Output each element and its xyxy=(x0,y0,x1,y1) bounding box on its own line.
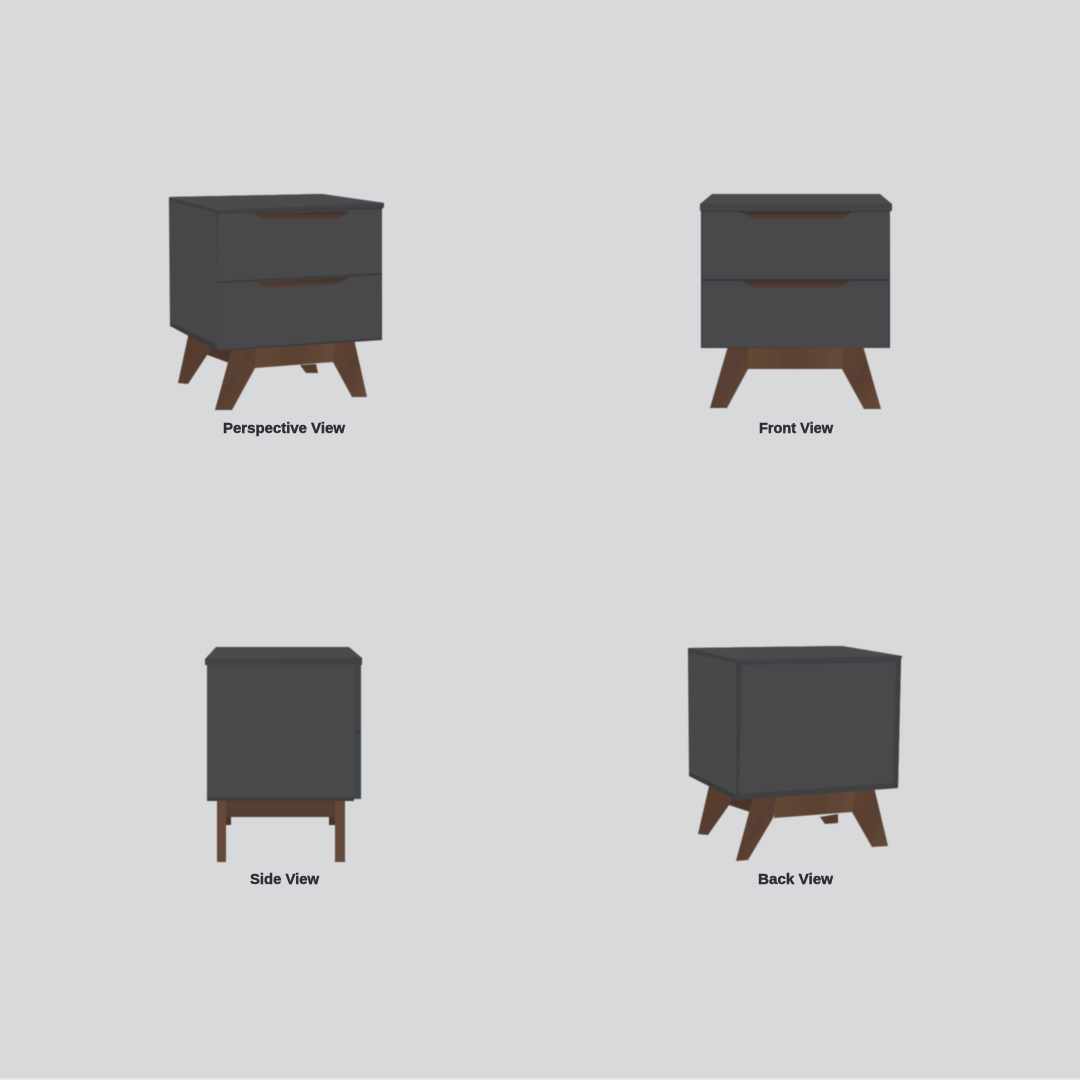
nightstand: front xyxy=(700,194,892,409)
bottom edge strip xyxy=(0,1078,1080,1080)
panel: back view xyxy=(688,646,902,888)
panel: perspective view xyxy=(169,194,384,437)
caption: back view: Back View xyxy=(758,872,834,888)
panel: front view xyxy=(700,194,892,437)
nightstand: back xyxy=(688,646,902,861)
caption: front view: Front View xyxy=(759,421,834,437)
caption: perspective view: Perspective View xyxy=(223,421,346,437)
nightstand: perspective xyxy=(169,194,384,410)
nightstand: side xyxy=(205,647,362,862)
caption: side view: Side View xyxy=(250,872,320,888)
panel: side view xyxy=(205,647,362,888)
